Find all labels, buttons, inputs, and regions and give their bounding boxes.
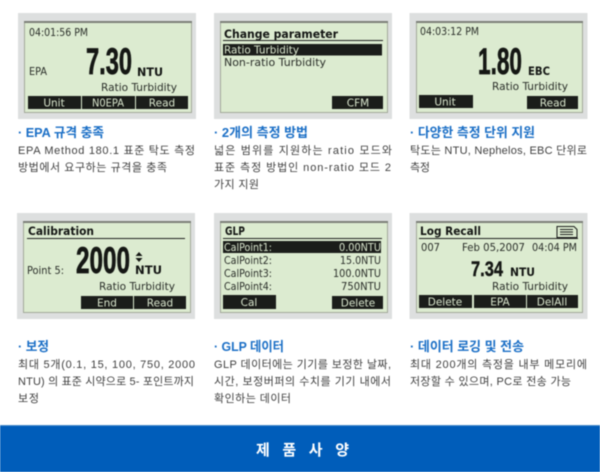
LCD screen: calibration: Read — [147, 298, 173, 310]
icon: memory card — [557, 226, 577, 238]
description: logging — [410, 358, 587, 388]
LCD screen: log recall — [410, 213, 588, 319]
LCD screen: EBC reading: Unit — [434, 96, 456, 108]
description: calibration: 최대 5개(0.1, 15, 100, 750, 2000 — [18, 358, 195, 371]
LCD screen: EBC reading — [410, 13, 588, 119]
LCD screen: GLP: Delete — [341, 298, 375, 310]
LCD screen: EPA reading: 7.30 — [86, 41, 132, 82]
LCD screen: EBC reading: 04:03:12 PM — [420, 25, 479, 38]
description: GLP — [214, 358, 391, 405]
LCD screen: EBC reading: 1.80 — [478, 41, 522, 82]
LCD screen: change parameter — [214, 13, 392, 119]
description: methods — [214, 143, 392, 191]
panel: GLP data — [214, 213, 392, 405]
description: units: 측정 — [410, 161, 430, 174]
description: GLP: 시간, 보정버퍼의 수치를 기기 내에서 — [214, 375, 391, 388]
LCD screen: calibration: Calibration — [28, 224, 94, 238]
LCD screen: EBC reading: EBC — [528, 64, 550, 78]
LCD screen: GLP: CalPoint4: — [224, 280, 272, 293]
LCD screen: log recall: EPA — [490, 296, 511, 308]
description: GLP: 확인하는 데이터 — [214, 391, 291, 405]
heading: calibration: · 보정 — [18, 339, 49, 354]
description: EPA: EPA Method 180.1 표준 탁도 측정 — [18, 144, 195, 157]
LCD screen: calibration: End — [97, 298, 117, 310]
panel: data logging — [410, 213, 588, 388]
banner: product specifications — [0, 425, 600, 472]
LCD screen: GLP: 100.0NTU — [333, 267, 381, 280]
LCD screen: log recall: Delete — [428, 296, 462, 308]
description: methods: 표준 측정 방법인 non-ratio 모드 2 — [214, 161, 391, 174]
panel: calibration — [17, 213, 195, 405]
description: logging: 최대 200개의 측정을 내부 메모리에 — [410, 358, 587, 371]
LCD screen: GLP: 0.00NTU — [339, 241, 381, 254]
description: methods: 가지 지원 — [214, 178, 259, 191]
LCD screen: EPA reading — [18, 13, 196, 119]
description: methods: 넓은 범위를 지원하는 ratio 모드와 — [214, 143, 392, 157]
description: GLP: GLP 데이터에는 기기를 보정한 날짜, — [214, 358, 391, 371]
LCD screen: change parameter: CFM — [347, 98, 369, 110]
panel: EPA compliance — [18, 13, 196, 174]
LCD screen: GLP: CalPoint1: — [224, 241, 272, 254]
LCD screen: GLP: CalPoint2: — [224, 254, 272, 267]
LCD screen: log recall: DelAll — [537, 296, 567, 308]
LCD screen: EPA reading: Unit — [43, 98, 65, 110]
LCD screen: EPA reading: EPA — [29, 65, 47, 78]
LCD screen: calibration: Point 5: — [27, 264, 64, 277]
LCD screen: log recall: 7.34 — [471, 258, 503, 281]
LCD screen: calibration — [17, 213, 195, 319]
description: calibration: 보정 — [18, 392, 39, 405]
LCD screen: log recall: Ratio Turbidity — [492, 280, 568, 293]
heading: logging: · 데이터 로깅 및 전송 — [410, 339, 524, 354]
LCD screen: log recall: 007 — [421, 241, 440, 254]
LCD screen: GLP — [214, 213, 392, 319]
LCD screen: EBC reading: Read — [540, 98, 566, 110]
LCD screen: GLP: Cal — [241, 297, 257, 309]
LCD screen: EPA reading: Read — [149, 98, 175, 110]
description: logging: 저장할 수 있으며, PC로 전송 가능 — [410, 375, 571, 388]
LCD screen: change parameter: Non-ratio Turbidity — [224, 56, 326, 69]
LCD screen: EPA reading: Ratio Turbidity — [101, 81, 177, 94]
LCD screen: log recall: Feb 05,2007 — [462, 241, 525, 254]
heading: EPA: · EPA 규격 충족 — [18, 125, 104, 140]
heading: GLP: · GLP 데이터 — [214, 339, 284, 354]
LCD screen: change parameter: Change parameter — [224, 27, 338, 41]
LCD screen: GLP: GLP — [225, 224, 245, 238]
LCD screen: log recall: NTU — [510, 265, 535, 279]
LCD screen: change parameter: Ratio Turbidity — [224, 44, 299, 56]
heading: methods: · 2개의 측정 방법 — [214, 125, 308, 140]
LCD screen: calibration: Ratio Turbidity — [99, 280, 175, 293]
LCD screen: GLP: CalPoint3: — [224, 267, 272, 280]
description: calibration: NTU) 의 표준 시약으로 5- 포인트까지 — [18, 374, 194, 388]
heading: units: · 다양한 측정 단위 지원 — [410, 125, 535, 140]
LCD screen: log recall: Log Recall — [420, 224, 481, 238]
LCD screen: EPA reading: 04:01:56 PM — [29, 26, 88, 39]
description: EPA: 방법에서 요구하는 규격을 충족 — [18, 160, 167, 174]
LCD screen: log recall: 04:04 PM — [532, 241, 577, 254]
panel: measurement units — [410, 13, 588, 174]
LCD screen: GLP: 15.0NTU — [340, 254, 381, 267]
description: calibration — [18, 358, 195, 405]
description: EPA — [18, 144, 195, 174]
description: units: 탁도는 NTU, Nephelos, EBC 단위로 — [410, 144, 587, 157]
banner: product specifications: 제 품 사 양 — [256, 442, 349, 459]
LCD screen: EBC reading: Ratio Turbidity — [492, 80, 568, 93]
panel: two measurement methods — [214, 13, 392, 191]
LCD screen: EPA reading: NTU — [137, 65, 163, 79]
LCD screen: calibration: NTU — [135, 263, 162, 277]
description: units — [410, 144, 587, 174]
LCD screen: EPA reading: N0EPA — [92, 98, 125, 110]
LCD screen: GLP: 750NTU — [341, 280, 381, 293]
LCD screen: calibration: 2000 — [76, 240, 130, 281]
